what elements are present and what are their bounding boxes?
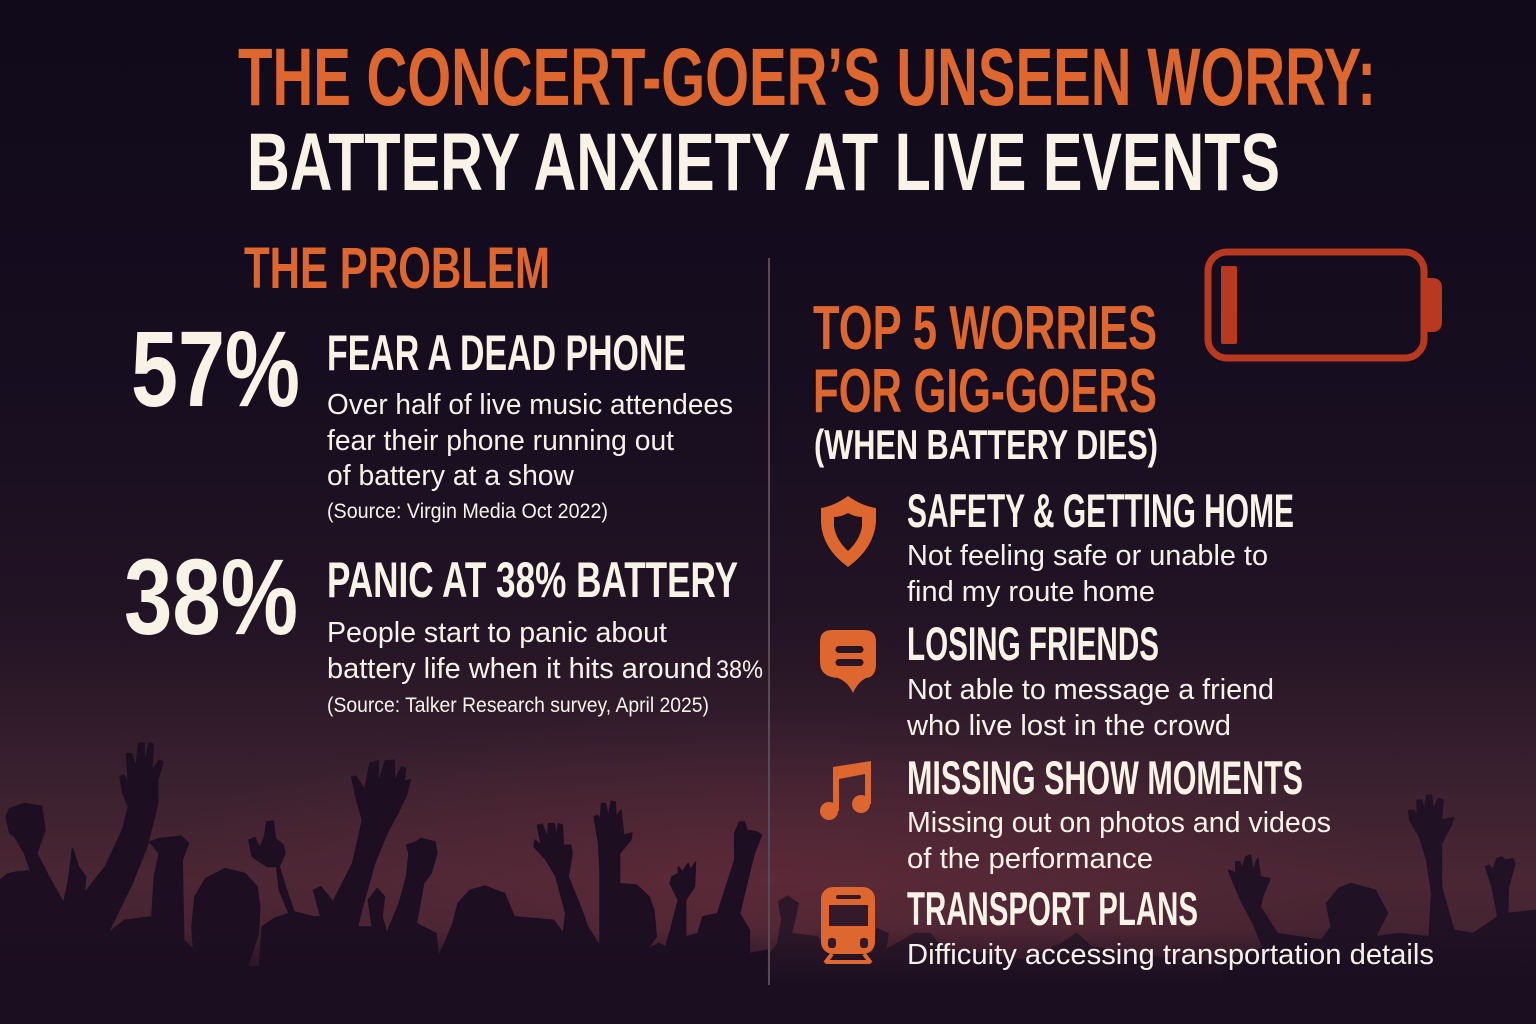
heading: top 5 worries: FOR GIG-GOERS [813, 357, 1157, 426]
crowd silhouette [0, 743, 1536, 1024]
worry: losing friends: LOSING FRIENDS [907, 617, 1159, 670]
worry: safety [821, 484, 1294, 608]
heading: the problem: THE PROBLEM [244, 236, 550, 301]
stat: 38% panic at battery: People start to panic about [327, 617, 667, 649]
worry: losing friends [820, 617, 1274, 742]
stat: 38% panic at battery: 38% [716, 656, 763, 684]
heading: top 5 worries: (WHEN BATTERY DIES) [814, 421, 1158, 468]
worry: missing show moments [820, 751, 1331, 875]
icon: music notes [820, 761, 871, 820]
stat: 57% fear a dead phone: Over half of live music attendees [327, 389, 733, 421]
stat: 38% panic at battery [124, 536, 763, 717]
heading: top 5 worries: TOP 5 WORRIES [813, 294, 1157, 363]
stat: 57% fear a dead phone: FEAR A DEAD PHONE [327, 325, 686, 381]
worry: missing show moments: MISSING SHOW MOMENTS [907, 751, 1303, 804]
stat: 57% fear a dead phone: fear their phone running out [327, 425, 674, 457]
worry: transport plans: Difficuity accessing transportation details [907, 939, 1434, 971]
icon: train [821, 887, 875, 963]
worry: transport plans [821, 882, 1434, 971]
stat: 57% fear a dead phone: (Source: Virgin Media Oct 2022) [327, 500, 608, 523]
worry: losing friends: who live lost in the crowd [906, 710, 1231, 742]
divider [768, 258, 770, 985]
stat: 57% fear a dead phone [131, 308, 733, 523]
heading: top 5 worries [813, 294, 1158, 468]
icon: chat bubble [820, 630, 876, 693]
icon: shield [821, 496, 876, 567]
title [238, 32, 1376, 208]
icon: low battery [1208, 252, 1442, 358]
worry: missing show moments: Missing out on photos and videos [907, 807, 1331, 839]
stat: 38% panic at battery: PANIC AT 38% BATTERY [327, 552, 738, 608]
stat: 57% fear a dead phone: 57% [131, 308, 300, 429]
worry: losing friends: Not able to message a friend [907, 674, 1274, 706]
worry: safety: SAFETY & GETTING HOME [907, 484, 1294, 537]
stat: 38% panic at battery: (Source: Talker Research survey, April 2025) [327, 694, 709, 717]
stat: 38% panic at battery: battery life when it hits around [327, 653, 712, 685]
worry: safety: find my route home [907, 576, 1155, 608]
worry: missing show moments: of the performance [907, 843, 1153, 875]
worry: transport plans: TRANSPORT PLANS [907, 882, 1198, 935]
stat: 38% panic at battery: 38% [124, 536, 298, 657]
worry: safety: Not feeling safe or unable to [907, 540, 1268, 572]
stat: 57% fear a dead phone: of battery at a show [327, 460, 575, 492]
